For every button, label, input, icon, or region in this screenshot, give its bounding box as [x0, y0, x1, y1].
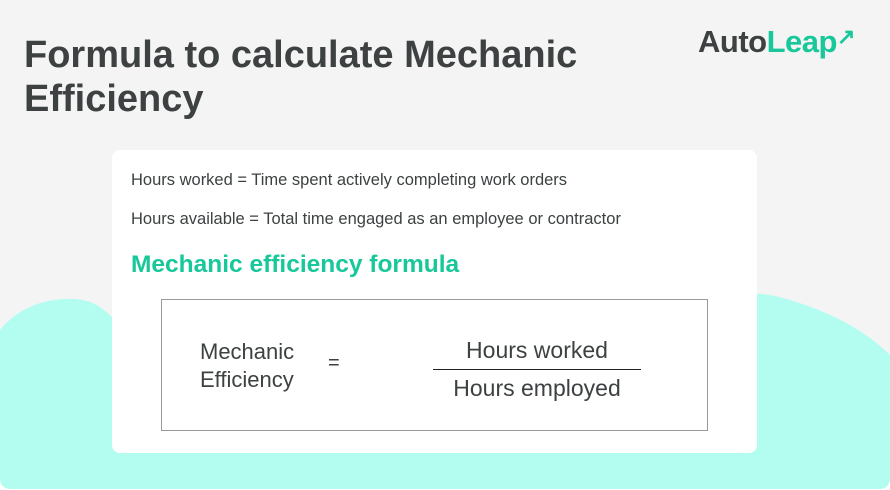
logo: AutoLeap: AutoLeap↗	[698, 24, 855, 59]
fraction	[433, 337, 641, 401]
subheading: Mechanic efficiency formula	[131, 251, 459, 278]
fraction: Hours employed	[453, 375, 621, 401]
text: hours worked definition: Hours worked = Time spent actively completing work orders	[131, 171, 567, 189]
equals sign: =	[328, 352, 340, 374]
left side label: Mechanic	[200, 339, 294, 364]
left side label	[200, 339, 294, 392]
title: Formula to calculate Mechanic Efficiency	[24, 34, 577, 120]
panel: formula card	[112, 150, 757, 453]
fraction: Hours worked	[466, 337, 608, 363]
formula box	[161, 299, 708, 431]
left side label: Efficiency	[200, 367, 294, 392]
text: hours available definition: Hours available = Total time engaged as an employee or contractor	[131, 210, 621, 228]
